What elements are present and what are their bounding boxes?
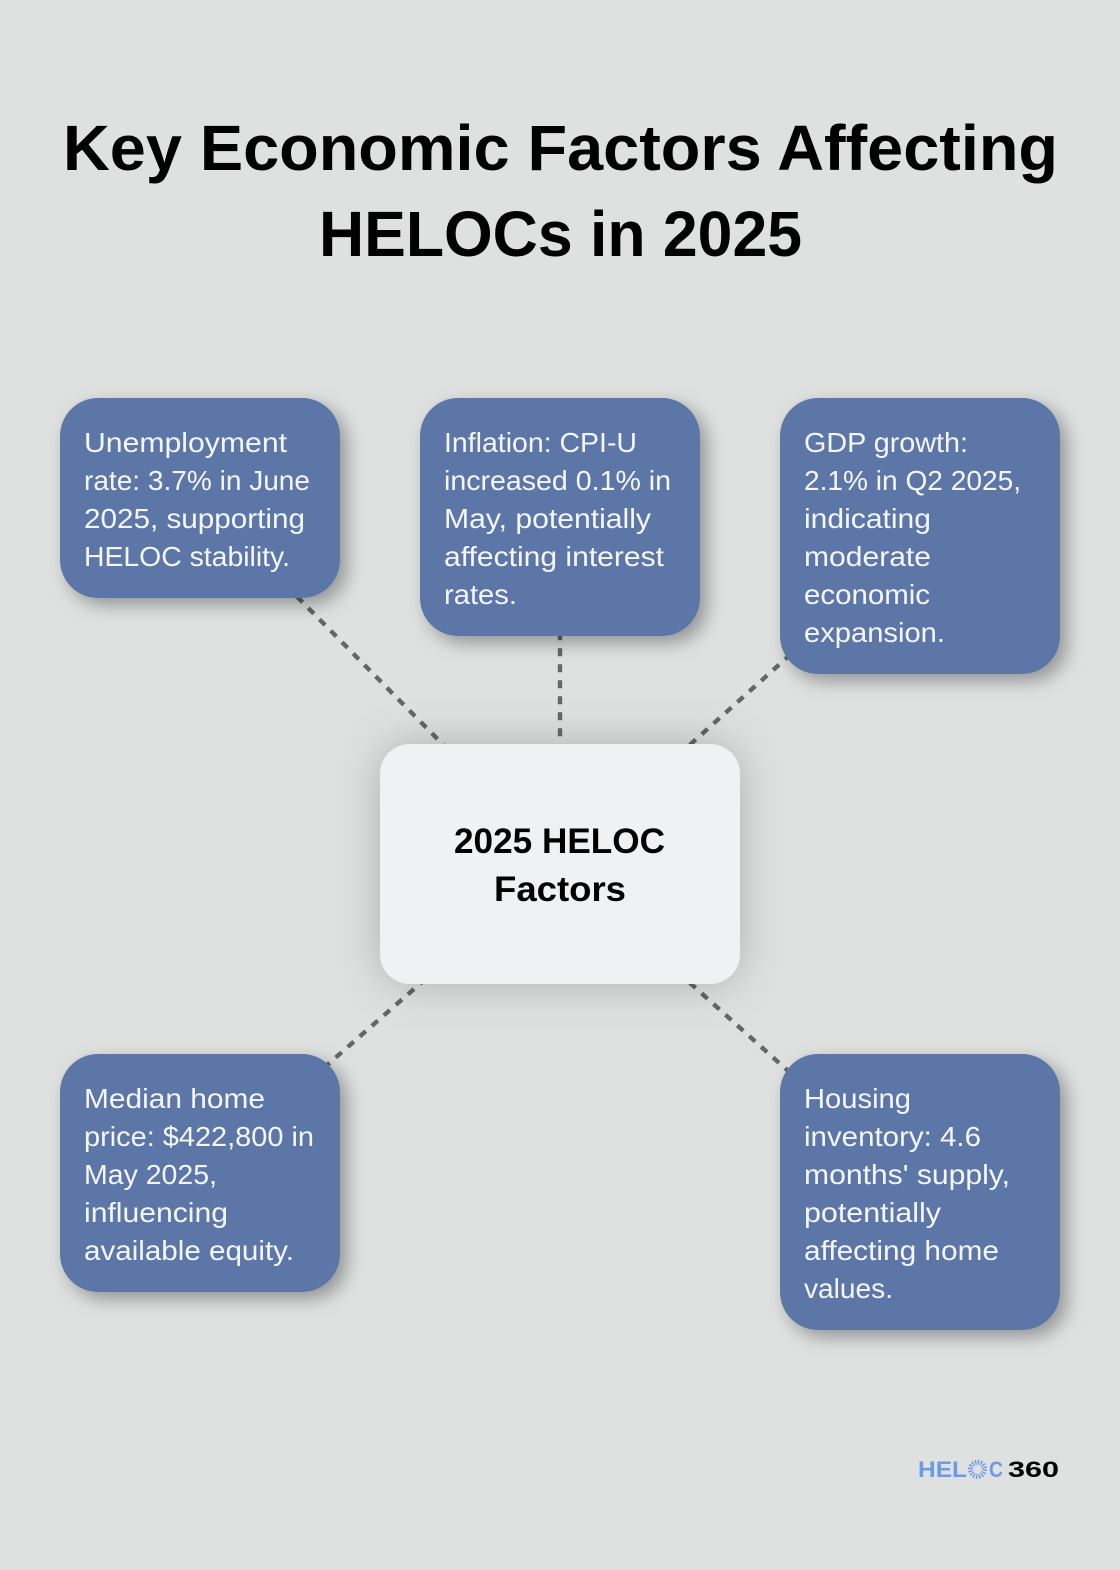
- connector: housing inventory to center: [690, 983, 791, 1074]
- panel: GDP growth: economic: [804, 579, 930, 610]
- panel: median home price: price: $422,800 in: [84, 1121, 314, 1152]
- panel: GDP growth: indicating: [804, 503, 931, 534]
- panel: housing inventory: months' supply,: [804, 1159, 1010, 1190]
- connector: unemployment to center: [297, 597, 446, 748]
- panel: median home price: [60, 1054, 340, 1292]
- panel: inflation: increased 0.1% in: [444, 465, 671, 496]
- panel: GDP growth: moderate: [804, 541, 931, 572]
- panel: unemployment: 2025, supporting: [84, 503, 305, 534]
- logo: HELOC360: [918, 1457, 1059, 1482]
- panel: median home price: Median home: [84, 1083, 265, 1114]
- panel: unemployment: [60, 398, 340, 598]
- logo: HELOC360: C: [989, 1457, 1003, 1482]
- panel: GDP growth: 2.1% in Q2 2025,: [804, 465, 1021, 496]
- title: [63, 112, 1058, 270]
- panel: housing inventory: [780, 1054, 1060, 1330]
- panel: housing inventory: affecting home: [804, 1235, 999, 1266]
- panel: GDP growth: [780, 398, 1060, 674]
- panel: housing inventory: potentially: [804, 1197, 941, 1228]
- logo: HELOC360: 360: [1008, 1457, 1059, 1482]
- panel: center topic: [380, 744, 740, 984]
- panel: center topic: Factors: [494, 870, 626, 909]
- title: Key Economic Factors Affecting: [63, 112, 1058, 184]
- panel: housing inventory: values.: [804, 1273, 893, 1304]
- connector: inflation to center: [558, 632, 562, 750]
- panel: center topic: 2025 HELOC: [454, 822, 665, 861]
- panel: GDP growth: expansion.: [804, 617, 945, 648]
- logo: HELOC360: HEL: [918, 1457, 967, 1482]
- panel: median home price: influencing: [84, 1197, 228, 1228]
- panel: inflation: [420, 398, 700, 636]
- panel: unemployment: Unemployment: [84, 427, 287, 458]
- panel: inflation: May, potentially: [444, 503, 651, 534]
- connector: home price to center: [326, 978, 426, 1066]
- panel: housing inventory: inventory: 4.6: [804, 1121, 981, 1152]
- panel: inflation: rates.: [444, 579, 517, 610]
- title: HELOCs in 2025: [319, 198, 802, 270]
- panel: GDP growth: GDP growth:: [804, 427, 968, 458]
- panel: inflation: Inflation: CPI-U: [444, 427, 637, 458]
- panel: unemployment: HELOC stability.: [84, 541, 290, 572]
- panel: median home price: May 2025,: [84, 1159, 217, 1190]
- panel: inflation: affecting interest: [444, 541, 664, 572]
- panel: median home price: available equity.: [84, 1235, 294, 1266]
- connector: GDP to center: [687, 654, 791, 747]
- panel: housing inventory: Housing: [804, 1083, 911, 1114]
- panel: unemployment: rate: 3.7% in June: [84, 465, 310, 496]
- icon: swirl: [970, 1462, 984, 1476]
